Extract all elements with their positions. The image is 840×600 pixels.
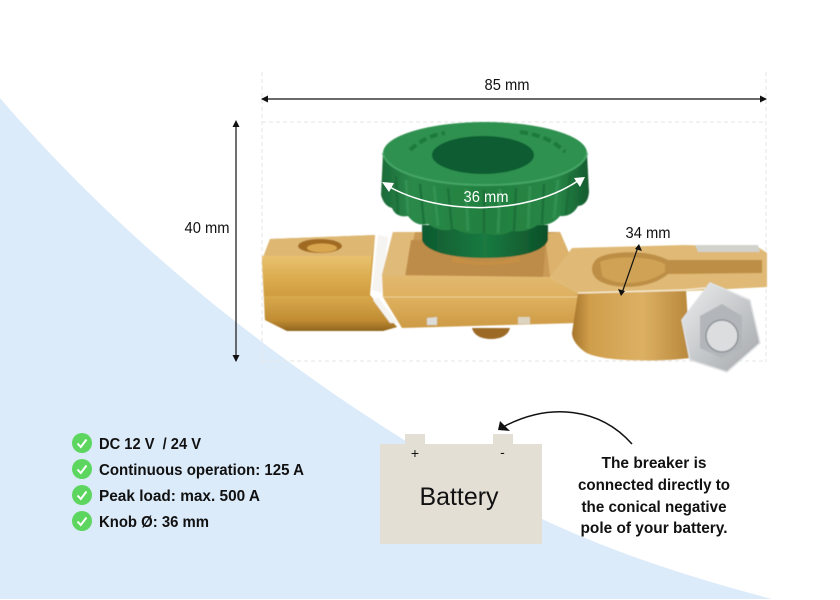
callout text: connected directly to [578,477,730,494]
hex nut and bolt [682,283,760,372]
green knob [381,122,589,235]
callout text: pole of your battery. [580,520,728,537]
width dimension [261,77,767,102]
battery diagram: - [500,444,505,460]
product photo: battery breaker [262,122,767,372]
blue background curve [0,98,772,599]
knob diameter arrow and label: 36 mm [464,189,508,206]
clamp diameter arrow and label: 34 mm [626,225,670,242]
knob diameter arrow and label [382,177,585,208]
white insulator [372,235,398,323]
spec: peak load: Peak load: max. 500 A [99,488,260,505]
battery diagram: + [411,445,419,461]
spec: voltage: DC 12 V / 24 V [99,436,201,453]
left terminal block [262,235,397,331]
clamp diameter arrow and label [618,225,670,296]
spec: knob diameter [72,511,209,531]
battery diagram [380,434,542,544]
spec: continuous operation: Continuous operation: 125 A [99,462,304,479]
spec: knob diameter: Knob Ø: 36 mm [99,514,209,531]
dashed guide lines [262,72,766,362]
spec: voltage [72,433,201,453]
specification list [72,433,304,531]
battery diagram: Battery [420,483,499,511]
green stem [422,225,548,265]
height dimension: 40 mm [184,220,230,237]
width dimension: 85 mm [484,77,530,94]
callout text: The breaker is [602,455,707,472]
knob markings [410,132,565,152]
height dimension [184,120,240,362]
curved arrow to negative pole [498,412,632,444]
callout text [578,455,730,537]
callout text: the conical negative [582,499,727,516]
centre plate [382,232,578,339]
right clamp [550,245,767,360]
